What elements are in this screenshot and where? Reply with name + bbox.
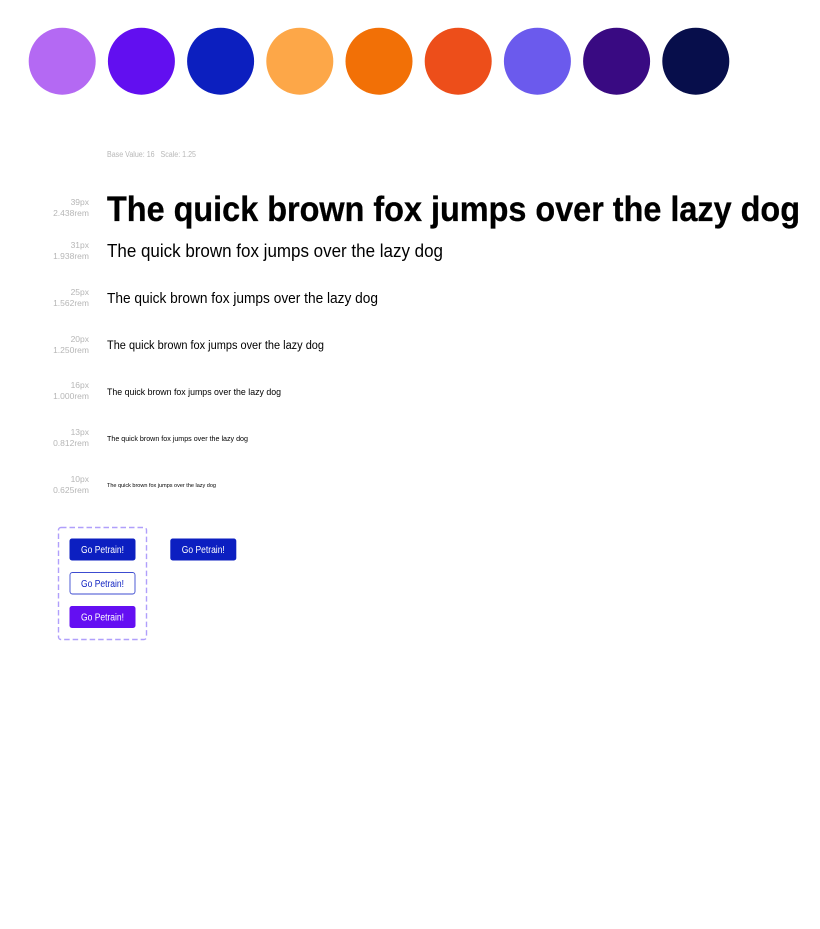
16px size label: 1.000rem bbox=[53, 391, 89, 401]
button: standalone blue bbox=[170, 538, 236, 560]
button: outline: Go Petrain! bbox=[81, 579, 124, 590]
25px size label bbox=[53, 287, 90, 308]
31px size label: 1.938rem bbox=[53, 251, 89, 261]
button: primary blue bbox=[70, 538, 136, 560]
25px specimen: The quick brown fox jumps over the lazy dog bbox=[107, 291, 378, 307]
39px size label bbox=[53, 197, 90, 218]
10px size label: 0.625rem bbox=[53, 485, 89, 495]
button: primary blue: Go Petrain! bbox=[81, 545, 124, 556]
dashed component frame bbox=[58, 528, 146, 640]
13px size label: 0.812rem bbox=[53, 438, 89, 448]
button: violet: Go Petrain! bbox=[81, 612, 124, 624]
31px size label bbox=[53, 240, 90, 261]
31px size label: 31px bbox=[71, 240, 90, 250]
16px size label: 16px bbox=[71, 380, 90, 390]
10px specimen: The quick brown fox jumps over the lazy dog bbox=[107, 483, 216, 489]
39px size label: 39px bbox=[71, 197, 90, 207]
20px size label: 1.250rem bbox=[53, 345, 89, 355]
20px size label: 20px bbox=[71, 334, 90, 344]
20px specimen: The quick brown fox jumps over the lazy dog bbox=[107, 340, 324, 352]
31px specimen: The quick brown fox jumps over the lazy dog bbox=[107, 241, 443, 261]
16px specimen: The quick brown fox jumps over the lazy dog bbox=[107, 387, 281, 397]
25px size label: 1.562rem bbox=[53, 298, 89, 308]
button variants group bbox=[58, 528, 236, 640]
type scale specimens bbox=[53, 190, 800, 495]
16px size label bbox=[53, 380, 90, 401]
button: standalone blue: Go Petrain! bbox=[182, 545, 225, 556]
25px size label: 25px bbox=[71, 287, 90, 297]
10px size label bbox=[53, 474, 90, 495]
39px size label: 2.438rem bbox=[53, 208, 89, 218]
13px size label bbox=[53, 427, 90, 448]
13px size label: 13px bbox=[71, 427, 90, 437]
button: outline bbox=[70, 572, 135, 594]
button: violet bbox=[70, 606, 136, 628]
20px size label bbox=[53, 334, 90, 355]
10px size label: 10px bbox=[71, 474, 90, 484]
type scale settings caption: Base Value: 16 Scale: 1.25 bbox=[107, 150, 196, 159]
13px specimen: The quick brown fox jumps over the lazy dog bbox=[107, 434, 248, 443]
colour palette swatches bbox=[29, 28, 729, 95]
